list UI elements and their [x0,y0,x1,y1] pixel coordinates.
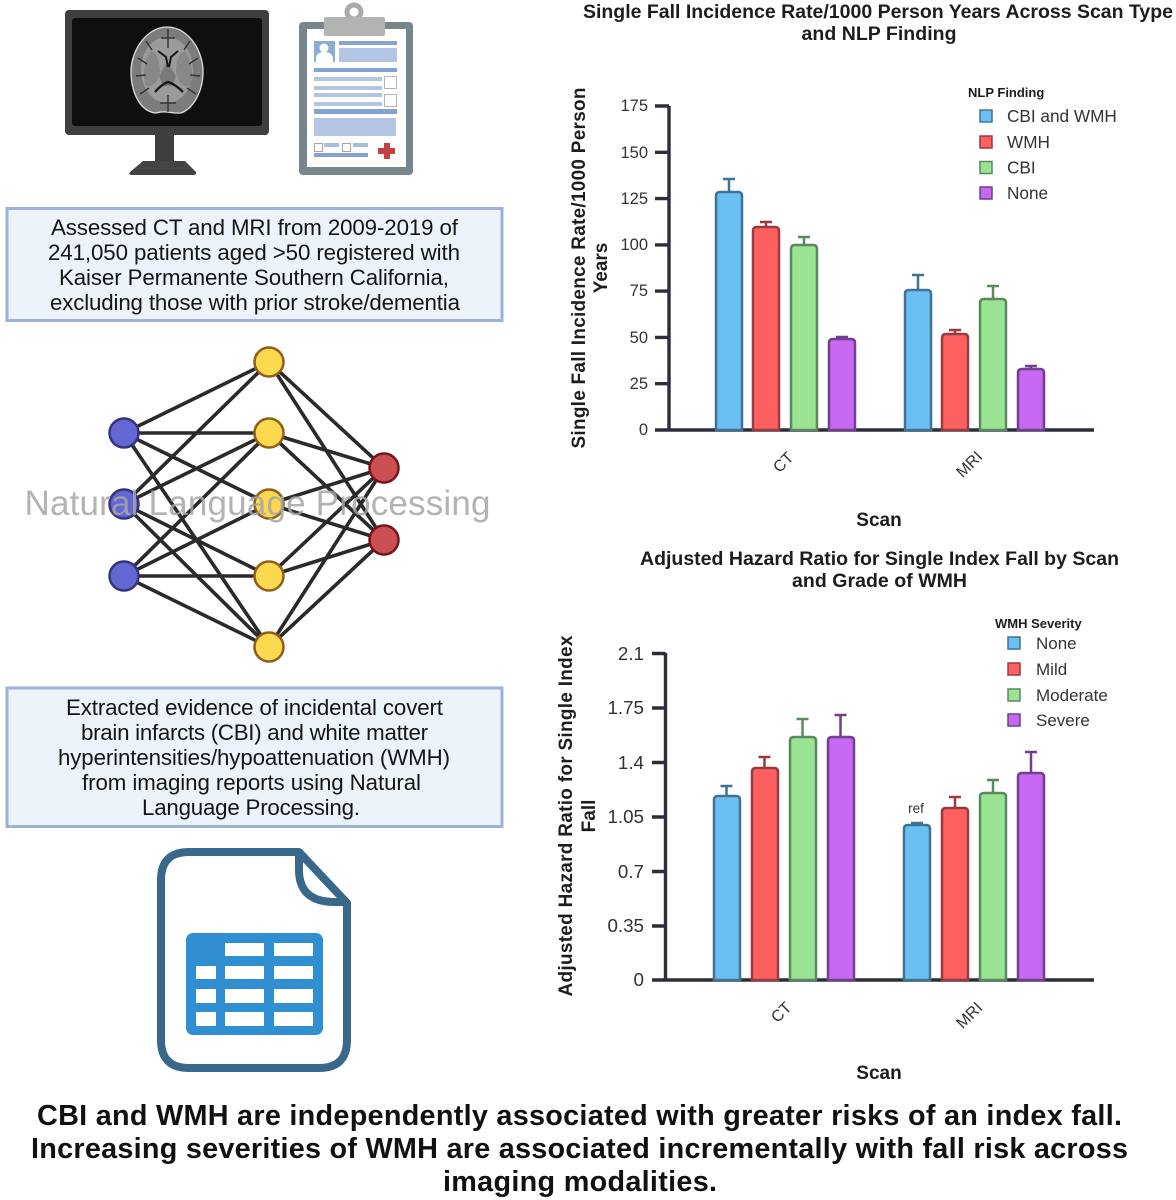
legend: NLP finding: CBI and WMH [1007,106,1117,126]
panel: cohort description: Kaiser Permanente Southern California, [59,265,449,290]
label: Natural Language Processing watermark: Natural Language Processing [24,484,490,523]
y axis with ticks: 2.1 [618,643,644,664]
y axis with ticks: 125 [620,190,648,208]
y axis with ticks: 25 [630,375,648,393]
bars: CT group [716,179,855,430]
legend: WMH severity: Mild [1036,660,1067,679]
panel: cohort description: excluding those with prior stroke/dementia [50,290,461,315]
y axis title: hazard ratio: Adjusted Hazard Ratio for Single Index [556,635,577,996]
y axis with ticks: 150 [620,144,648,162]
conclusion text: CBI and WMH are independently associated with greater risks of an index fall. [37,1100,1122,1132]
legend: NLP finding: WMH [1007,132,1050,152]
x axis category labels: MRI [953,999,986,1032]
y axis with ticks [620,97,1094,439]
panel: extraction description [7,688,502,826]
bar chart: single fall incidence rate [569,85,1117,531]
panel: extraction description: Language Processing. [142,795,360,820]
conclusion text: imaging modalities. [443,1166,717,1198]
panel: extraction description: from imaging reports using Natural [82,770,421,795]
legend: WMH severity: None [1036,634,1077,653]
legend: NLP finding: None [1007,183,1048,203]
x axis category labels [768,999,986,1032]
x axis title: Scan [856,1063,902,1084]
bar chart: adjusted hazard ratio [556,616,1108,1084]
chart title: single fall incidence rate [583,1,1173,45]
y axis with ticks: 0.35 [607,915,644,936]
icon: spreadsheet file [161,852,347,1068]
y axis title: hazard ratio [556,635,600,996]
legend: NLP finding: CBI [1007,158,1036,178]
icon: monitor showing brain scan [65,10,269,175]
bars: MRI group [905,275,1044,430]
icon: medical clipboard [299,5,413,175]
annotation: ref: ref [908,801,924,816]
y axis with ticks: 175 [620,97,648,115]
y axis with ticks: 1.75 [607,697,644,718]
conclusion text [31,1100,1128,1198]
chart title: adjusted hazard ratio: Adjusted Hazard Ratio for Single Index Fall by Scan [640,548,1119,570]
y axis with ticks: 75 [630,282,648,300]
y axis with ticks: 50 [630,329,648,347]
legend: NLP finding: NLP Finding [968,85,1044,100]
conclusion text: Increasing severities of WMH are associated incrementally with fall risk across [31,1133,1128,1165]
chart title: adjusted hazard ratio: and Grade of WMH [792,570,967,592]
panel: cohort description [7,208,502,320]
panel: cohort description: Assessed CT and MRI from 2009-2019 of [51,215,459,240]
y axis with ticks: 0 [634,969,644,990]
y axis with ticks: 1.05 [607,806,644,827]
legend: WMH severity [995,616,1108,730]
legend: NLP finding [968,85,1117,203]
x axis title: Scan [856,510,902,531]
y axis title: hazard ratio: Fall [579,800,600,832]
y axis title: incidence rate: Single Fall Incidence Rate/1000 Person [569,88,590,448]
x axis category labels: MRI [953,448,986,481]
y axis with ticks: 0 [639,421,648,439]
x axis category labels: CT [768,999,796,1026]
panel: extraction description: hyperintensities/hypoattenuation (WMH) [58,745,450,770]
chart title: adjusted hazard ratio [640,548,1119,592]
y axis with ticks: 0.7 [618,861,644,882]
legend: WMH severity: WMH Severity [995,616,1082,631]
panel: extraction description: brain infarcts (CBI) and white matter [81,720,429,745]
x axis category labels: CT [770,449,798,476]
panel: extraction description: Extracted evidence of incidental covert [66,695,444,720]
y axis with ticks: 1.4 [618,752,644,773]
chart title: single fall incidence rate: and NLP Finding [802,23,956,45]
panel: cohort description: 241,050 patients aged >50 registered with [48,240,460,265]
bars: CT group [714,715,854,980]
bars: MRI group [904,752,1044,980]
y axis with ticks: 100 [620,236,648,254]
legend: WMH severity: Severe [1036,711,1090,730]
chart title: single fall incidence rate: Single Fall Incidence Rate/1000 Person Years Across Scan Type [583,1,1173,23]
diagram: neural network [110,348,398,662]
y axis title: incidence rate: Years [591,243,612,293]
x axis category labels [770,448,986,481]
y axis with ticks [607,643,1094,990]
legend: WMH severity: Moderate [1036,686,1108,705]
y axis title: incidence rate [569,88,612,448]
